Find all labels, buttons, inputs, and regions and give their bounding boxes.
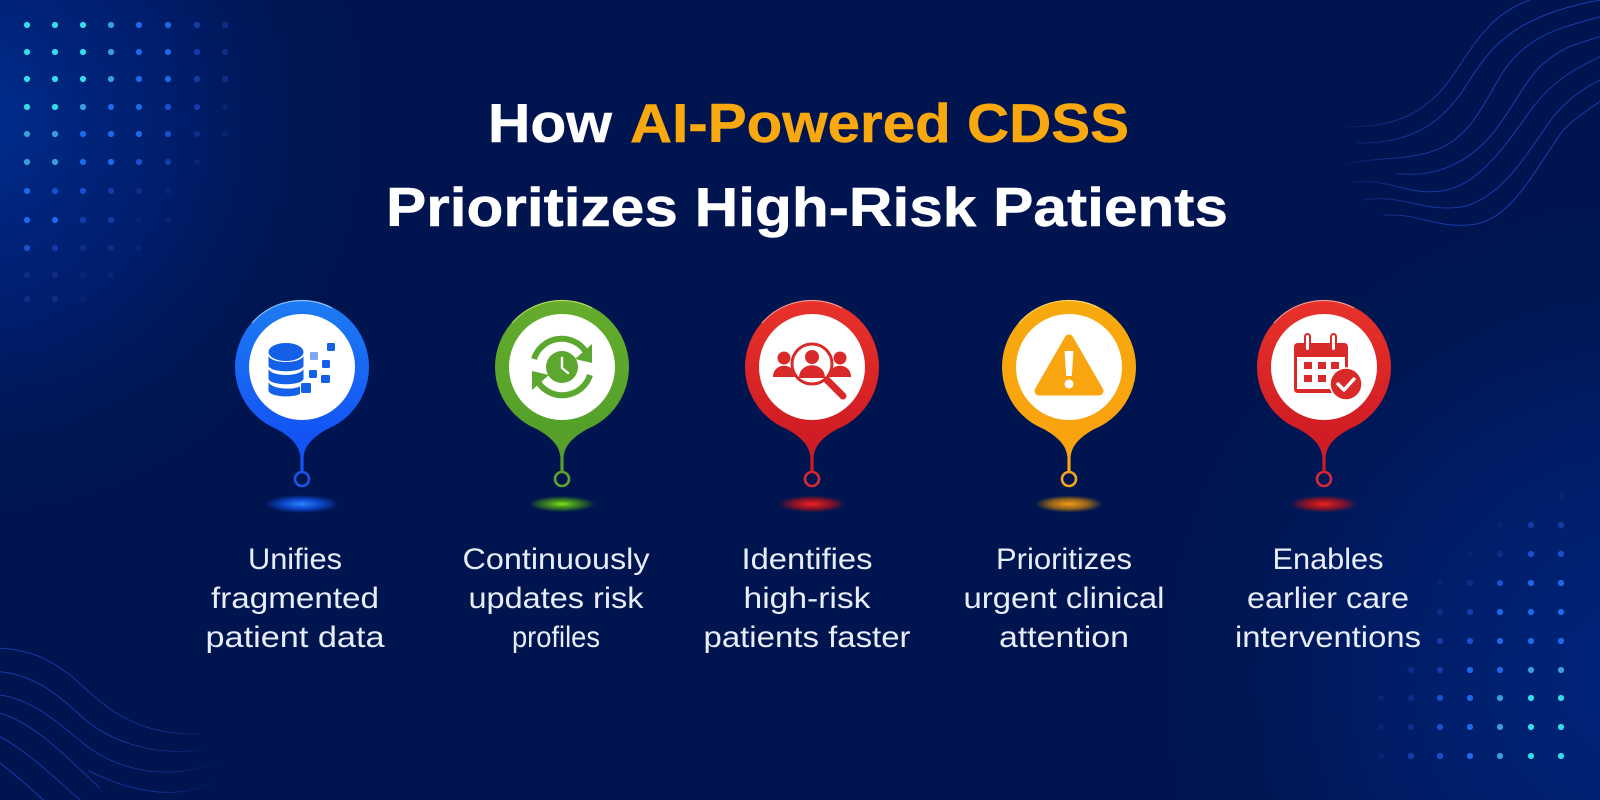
caption: Continuously	[462, 543, 650, 576]
icon: warning triangle	[1039, 339, 1099, 391]
caption	[462, 543, 650, 654]
caption: Identifies	[742, 543, 872, 576]
step 1: unifies data	[206, 300, 385, 654]
caption: fragmented	[211, 582, 379, 615]
caption: high-risk	[744, 582, 872, 615]
caption: profiles	[512, 621, 600, 654]
caption	[964, 543, 1164, 654]
title	[386, 92, 1228, 238]
wave lines: top right	[1345, 0, 1600, 225]
icon: calendar with check	[1294, 334, 1362, 400]
pin: red calendar	[1257, 300, 1391, 512]
title: AI-Powered CDSS	[630, 92, 1129, 154]
caption: Enables	[1272, 543, 1384, 576]
pin: red	[745, 300, 879, 512]
caption: patient data	[206, 621, 385, 654]
caption: attention	[999, 621, 1129, 654]
caption	[206, 543, 385, 654]
caption: earlier care	[1247, 582, 1409, 615]
pin: blue	[235, 300, 369, 513]
title: How	[488, 92, 612, 154]
step 4: prioritizes urgent attention	[964, 300, 1164, 654]
step 2: updates risk profiles	[462, 300, 650, 654]
caption	[1235, 543, 1421, 654]
icon: clock with refresh arrows	[532, 339, 592, 395]
pin: amber	[1002, 300, 1136, 512]
dot grid: bottom right	[1378, 493, 1565, 759]
dot grid: top left	[24, 22, 228, 302]
caption: updates risk	[468, 582, 645, 615]
pin: green	[495, 300, 629, 512]
caption	[704, 543, 911, 654]
step 5: enables earlier care	[1235, 300, 1421, 654]
icon: people under magnifier	[773, 344, 851, 396]
caption: Unifies	[248, 543, 342, 576]
caption: Prioritizes	[996, 543, 1132, 576]
caption: patients faster	[704, 621, 911, 654]
wave lines: bottom left	[0, 648, 217, 800]
caption: interventions	[1235, 621, 1421, 654]
caption: urgent clinical	[964, 582, 1164, 615]
title: Prioritizes High-Risk Patients	[386, 176, 1228, 238]
icon: database with pixels	[268, 343, 335, 396]
step 3: identifies high-risk patients	[704, 300, 911, 654]
